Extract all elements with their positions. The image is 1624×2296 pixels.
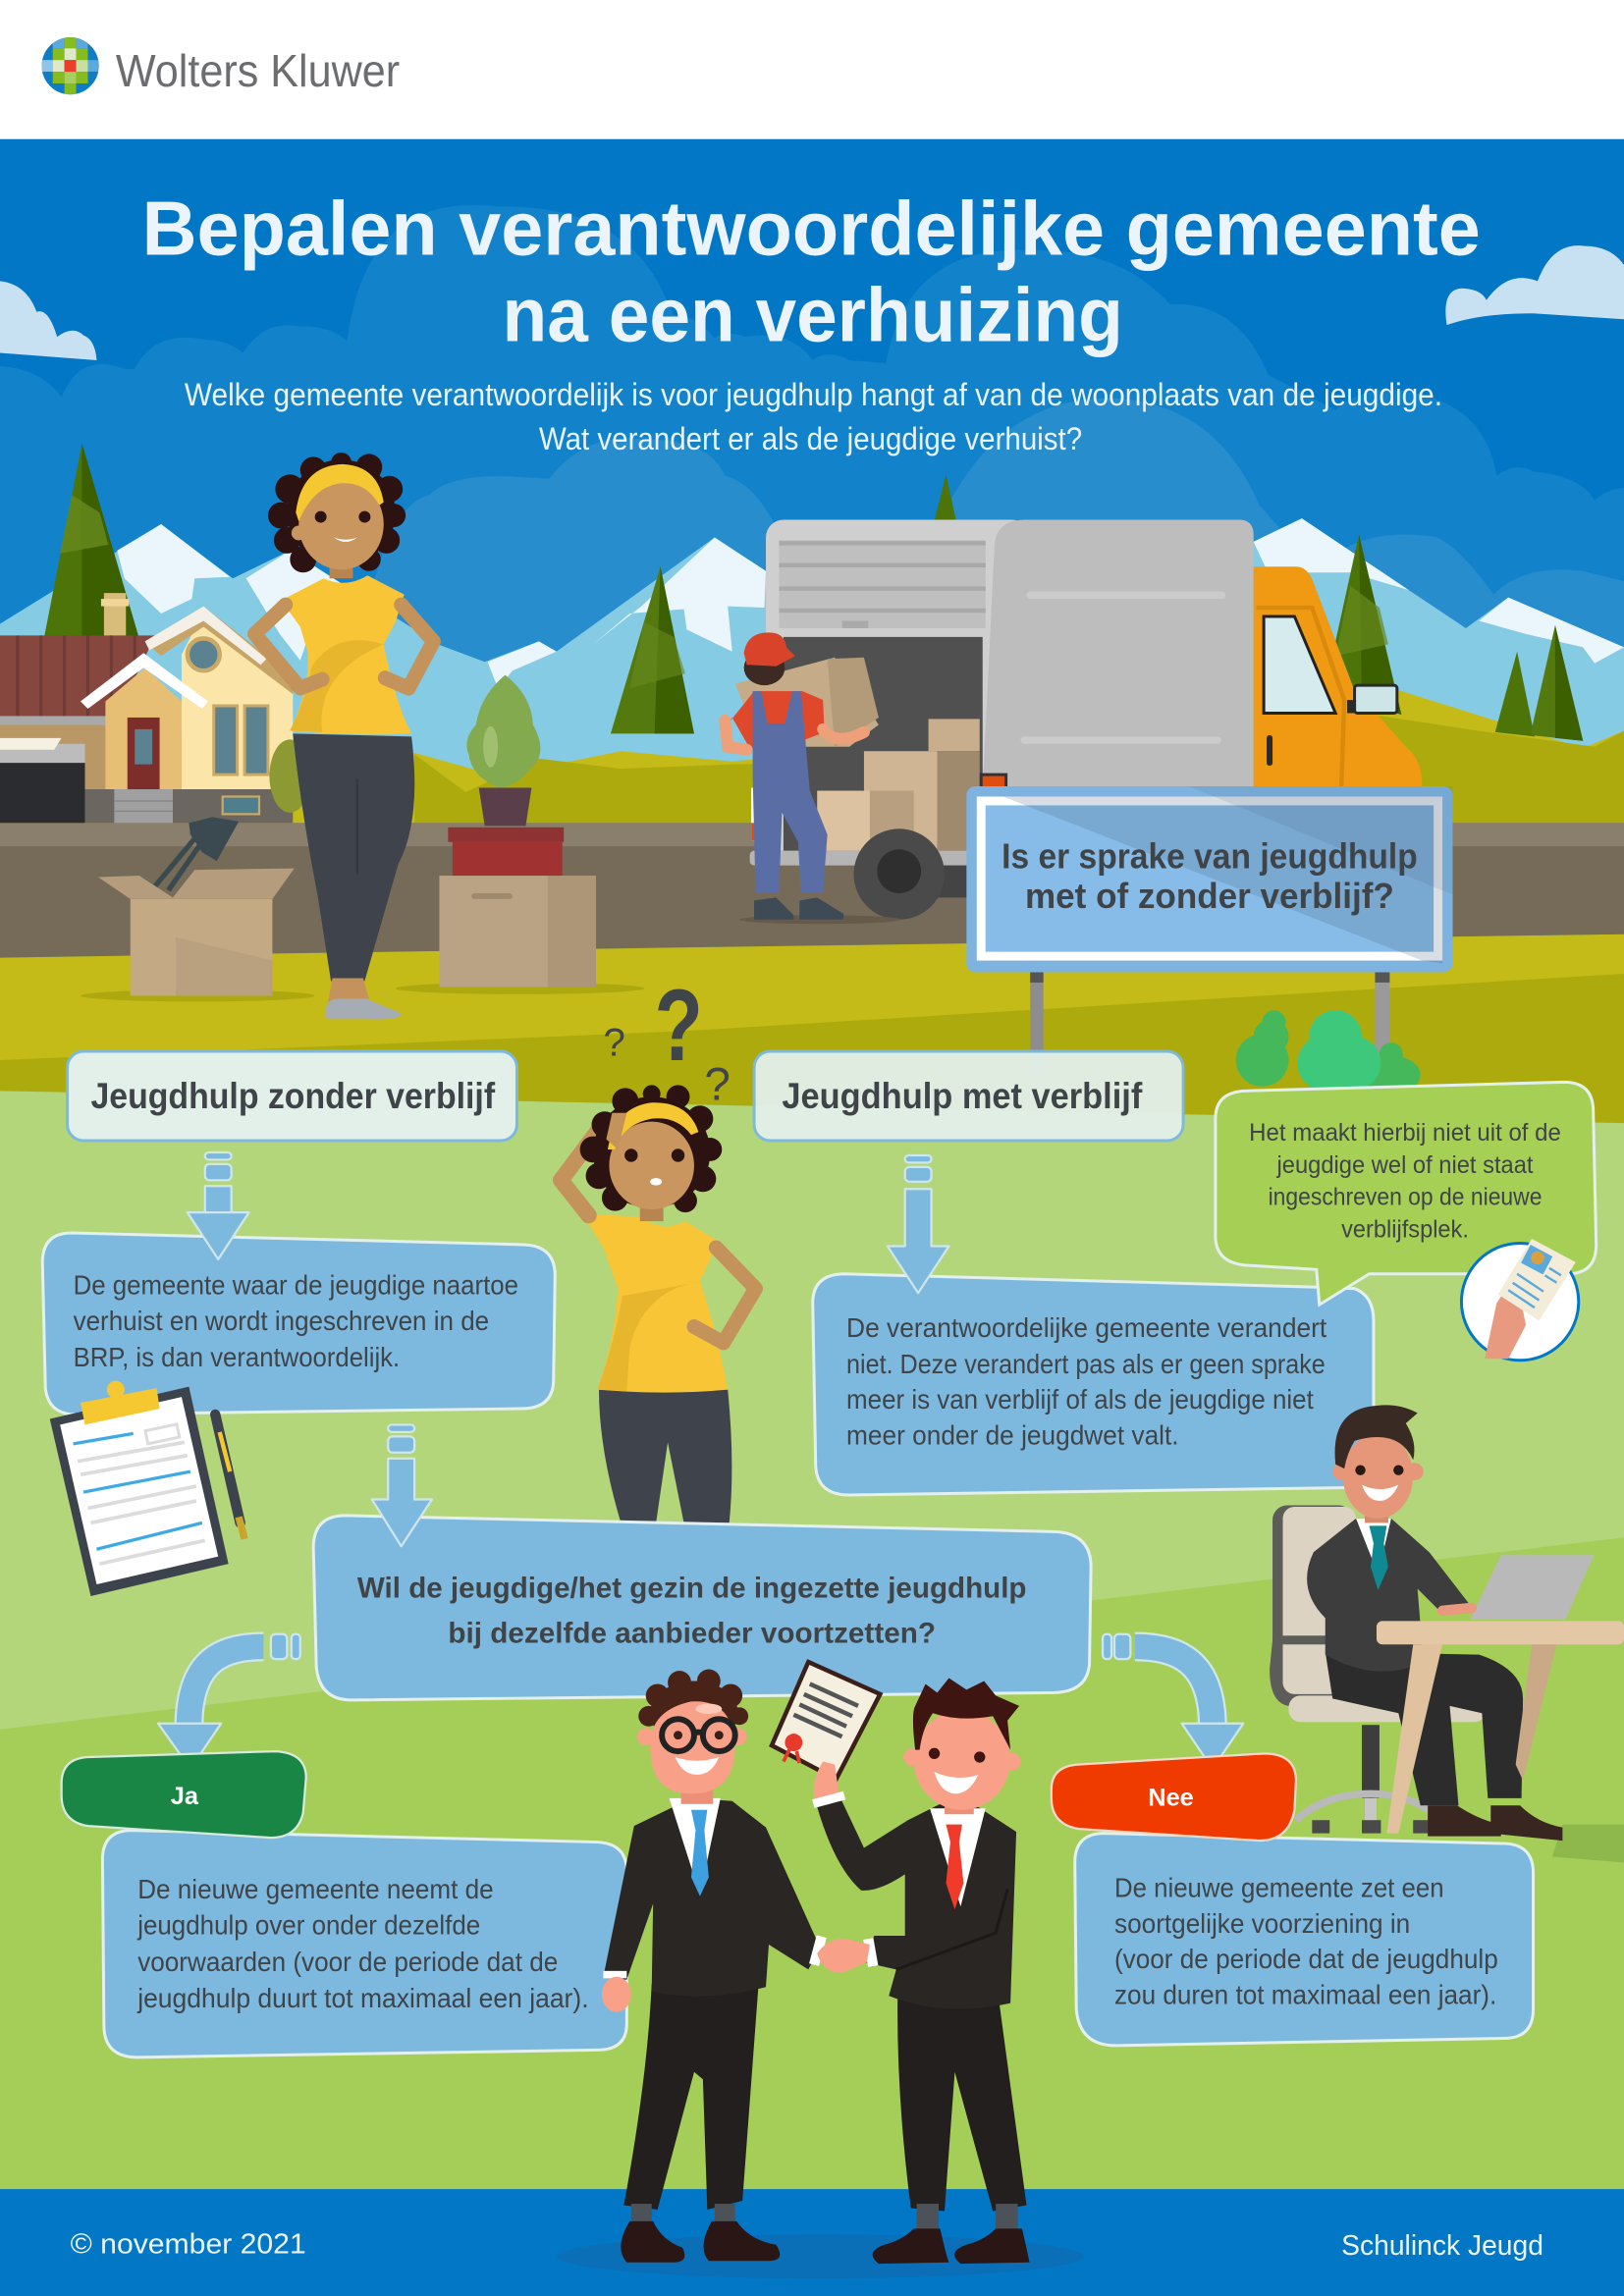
tab: yes [62, 1751, 306, 1838]
text box: responsible municipality does not change [813, 1274, 1374, 1495]
speech bubble: registration does not matter [1216, 1082, 1597, 1305]
sign: question with or without stay [966, 786, 1453, 1075]
illustration: woman with hands on hips [255, 453, 433, 1019]
arrow head over left box [188, 1212, 249, 1259]
shadow under men [557, 2234, 1084, 2278]
text box: question keep same provider [313, 1516, 1091, 1700]
illustration: man with glasses shaking hands [602, 1670, 827, 2263]
arrow: to right box [888, 1155, 948, 1293]
text box: municipality where young person moves: verhuist en wordt ingeschreven in de [74, 1306, 489, 1336]
speech bubble: registration does not matter: Het maakt hierbij niet uit of de [1249, 1120, 1561, 1147]
icon: clipboard and pen [50, 1381, 244, 1596]
jacket [1307, 1519, 1469, 1672]
head [1365, 1501, 1388, 1522]
heading box: youth care without stay: Jeugdhulp zonder verblijf [90, 1075, 496, 1116]
subtitle [185, 377, 1442, 456]
illustration: house [0, 593, 310, 823]
sign posts [1030, 972, 1389, 1075]
illustration: moving truck [750, 520, 1422, 920]
tab: yes: Ja [171, 1783, 199, 1810]
text box: yes outcome: voorwaarden (voor de periode dat de [137, 1947, 558, 1977]
head [681, 1784, 713, 1804]
header: white band with logo [41, 37, 399, 94]
title: na een verhuizing [503, 274, 1123, 358]
text box: question keep same provider: Wil de jeugdige/het gezin de ingezette jeugdhulp [357, 1572, 1026, 1604]
illustration: mover carrying box [725, 632, 900, 924]
curved arrow: to yes [158, 1634, 300, 1769]
text box: responsible municipality does not change: niet. Deze verandert pas als er geen sprake [846, 1349, 1326, 1379]
tab: no: Nee [1148, 1784, 1194, 1811]
legs and shoes [1326, 1652, 1523, 1805]
text box: responsible municipality does not change: meer is van verblijf of als de jeugdige niet [846, 1384, 1314, 1415]
logo wordmark: Wolters Kluwer [116, 45, 400, 96]
icon: Wolters Kluwer mosaic globe [41, 36, 99, 95]
title: Bepalen verantwoordelijke gemeente [142, 187, 1481, 272]
speech bubble: registration does not matter: jeugdige wel of niet staat [1276, 1152, 1534, 1179]
illustration: man with red tie shaking hands [812, 1678, 1029, 2264]
footer text right: Schulinck Jeugd [1341, 2230, 1543, 2262]
sign text: Is er sprake van jeugdhulp [1001, 836, 1418, 877]
illustration: businessman at desk with laptop [1272, 1405, 1624, 1862]
text box: responsible municipality does not change: De verantwoordelijke gemeente verandert [846, 1312, 1327, 1343]
subtitle: Welke gemeente verantwoordelijk is voor jeugdhulp hangt af van de woonplaats van de jeugdige. [185, 377, 1442, 412]
hills behind road [0, 690, 1624, 834]
text box: municipality where young person moves [42, 1233, 555, 1415]
text box: responsible municipality does not change: meer onder de jeugdwet valt. [846, 1420, 1179, 1451]
sign text: met of zonder verblijf? [1025, 876, 1394, 916]
footer text left: © november 2021 [71, 2229, 306, 2261]
cloud: top right [1445, 245, 1624, 325]
text box: yes outcome [102, 1831, 626, 2057]
cloud: top left [0, 281, 96, 360]
text box: no outcome: soortgelijke voorziening in [1114, 1908, 1410, 1939]
footer band [0, 2189, 1624, 2296]
illustration: confused woman with question marks: ? [704, 1058, 731, 1110]
illustration: bushes [1236, 1010, 1421, 1094]
laptop [1470, 1555, 1594, 1620]
illustration: confused woman with question marks: ? [603, 1021, 625, 1065]
text box: municipality where young person moves: De gemeente waar de jeugdige naartoe [74, 1270, 518, 1301]
illustration: confused woman with question marks [561, 968, 756, 1522]
sign board [966, 786, 1453, 972]
illustration: certificate [772, 1662, 880, 1779]
text box: no outcome: De nieuwe gemeente zet een [1114, 1873, 1444, 1903]
speech bubble: registration does not matter: ingeschreven op de nieuwe [1269, 1185, 1542, 1211]
text box: no outcome: zou duren tot maximaal een jaar). [1114, 1979, 1496, 2009]
text box: yes outcome: De nieuwe gemeente neemt de [137, 1874, 494, 1904]
sign text [1001, 836, 1418, 916]
text box: yes outcome: jeugdhulp over onder dezelfde [136, 1910, 480, 1941]
trees [44, 444, 1583, 741]
icon: hand holding profile card [1461, 1239, 1579, 1361]
text box: question keep same provider: bij dezelfde aanbieder voortzetten? [448, 1618, 936, 1650]
heading box: youth care with stay [754, 1051, 1183, 1141]
office chair [1272, 1505, 1487, 1834]
arrow: into question box [372, 1424, 432, 1546]
tab: no [1052, 1753, 1296, 1841]
text box: no outcome: (voor de periode dat de jeugdhulp [1114, 1944, 1498, 1974]
text box: municipality where young person moves: BRP, is dan verantwoordelijk. [74, 1342, 400, 1372]
text box: no outcome [1075, 1834, 1534, 2046]
road [0, 823, 1624, 958]
jacket and arms [603, 1798, 820, 1997]
heading box: youth care with stay: Jeugdhulp met verblijf [782, 1075, 1143, 1116]
curved arrow: to no [1103, 1634, 1243, 1769]
heading box: youth care without stay [68, 1051, 516, 1141]
speech bubble: registration does not matter: verblijfsplek. [1341, 1216, 1469, 1243]
arrow: to left box [188, 1152, 249, 1259]
illustration: confused woman with question marks: ? [655, 968, 703, 1083]
trousers [623, 1984, 759, 2210]
desk [1377, 1621, 1624, 1834]
illustration: moving boxes and lamp [81, 675, 644, 1001]
title [142, 187, 1481, 358]
subtitle: Wat verandert er als de jeugdige verhuist? [539, 421, 1082, 456]
text box: yes outcome: jeugdhulp duurt tot maximaal een jaar). [136, 1983, 589, 2013]
